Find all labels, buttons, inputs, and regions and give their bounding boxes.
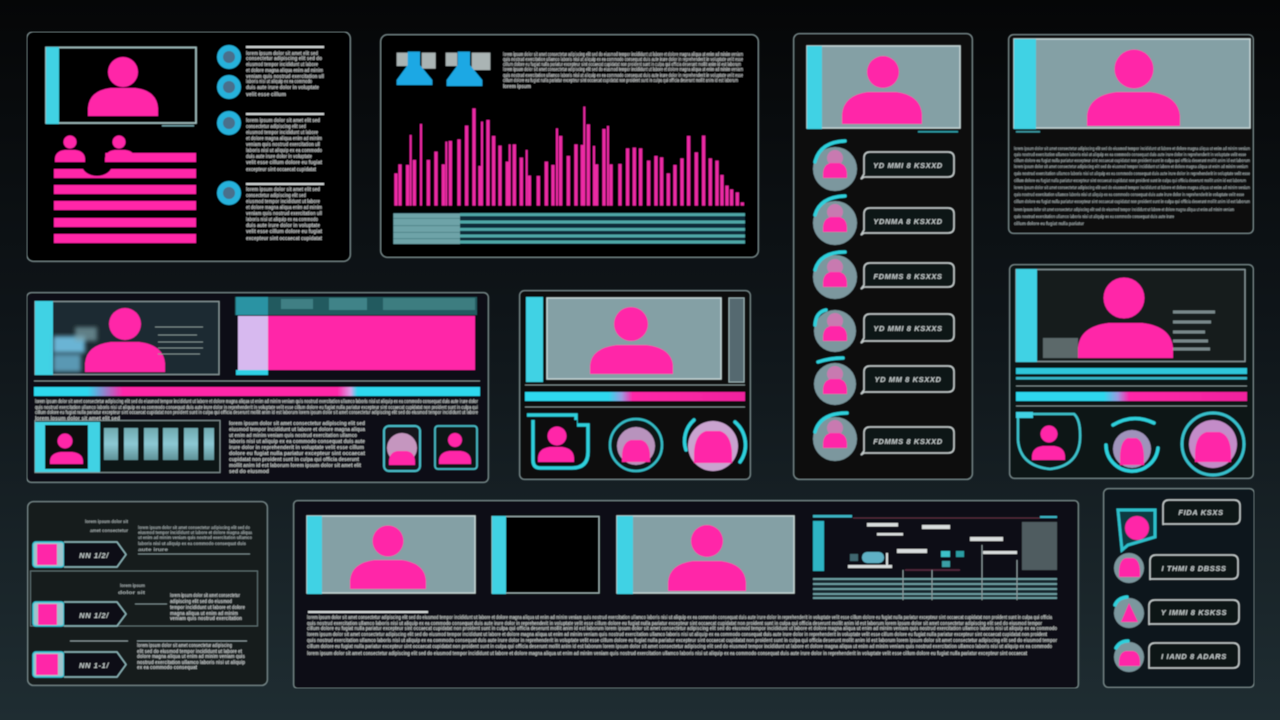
body text: lorem ipsum dolor sit amet consectetur adipiscing elit sed do eiusmod tempor incididunt ut labore et dolore magna aliqua ut enim ad minim veniam quis nostrud exercitation ullamco laboris nisi ut aliquip ex ea commodo consequat duis aute irure dolor in reprehenderit in voluptate velit esse cillum dolore eu fugiat nulla pariatur excepteur sint occaecat: [307, 651, 1027, 657]
avatar row 2: [813, 196, 954, 245]
first tag row: laboris nisi ut aliquip ex ea commodo consequat duis: [138, 541, 246, 546]
first tag row: lorem ipsum dolor sit amet consectetur adipiscing elit sed do: [138, 525, 250, 530]
panel: wide bottom: [294, 500, 1078, 688]
frame with person: [1016, 269, 1245, 362]
text block two: eiusmod tempor incididunt ut labore: [246, 130, 318, 136]
text block three: duis aute irure dolor in voluptate: [246, 223, 320, 229]
header text: lorem ipsum dolor sit amet consectetur adipiscing elit sed do eiusmod tempor incididunt ut labore et dolore magna aliqua ut enim ad minim veniam: [503, 52, 743, 58]
paragraph: dolore eu fugiat nulla pariatur excepteur sint occaecat: [229, 451, 365, 457]
text block two: velit esse cillum dolore eu fugiat: [246, 160, 322, 166]
third tag row: elit sed do eiusmod tempor incididunt ut labore et: [137, 649, 242, 655]
panel: bar chart: [380, 34, 758, 258]
text block one: duis aute irure dolor in voluptate: [246, 85, 319, 91]
panel: vertical list of avatars: [794, 34, 972, 480]
avatar row 2: YDNMA 8 KSXXD: [873, 217, 943, 226]
second tag row: NN 1/2/: [79, 611, 109, 620]
header icons: [397, 52, 490, 86]
header text: cillum dolore eu fugiat nulla pariatur excepteur sint occaecat cupidatat non proident sunt in culpa qui officia deserunt mollit anim id est laborum: [503, 62, 741, 68]
first tag row: amet consectetur: [90, 528, 128, 533]
bubble row 1: FIDA KSXS: [1178, 508, 1224, 517]
third tag row: ex ea commodo consequat: [137, 665, 197, 671]
paragraph: [229, 421, 365, 475]
text block one: lorem ipsum dolor sit amet elit sed: [246, 51, 318, 57]
panel: profile with text: [1008, 34, 1254, 234]
second tag row: lorem ipsum: [120, 583, 145, 588]
second tag row: veniam quis nostrud exercitation: [170, 616, 242, 622]
paragraph: laboris nisi ut aliquip ex ea commodo consequat duis aute: [229, 439, 365, 445]
avatar row 1: YD MMI 8 KSXXD: [873, 161, 943, 170]
text block two: [246, 113, 324, 173]
text block two: veniam quis nostrud exercitation ull: [246, 142, 321, 148]
first tag row: lorem ipsum dolor sit: [85, 519, 128, 524]
avatar row 3: FDMMS 8 KSXXS: [873, 272, 943, 281]
header text: cillum dolore eu fugiat nulla pariatur excepteur sint occaecat cupidatat non proident sunt in culpa qui officia deserunt mollit anim id est laborum: [503, 78, 738, 84]
frame three with person: [617, 516, 794, 594]
third tag row: lorem ipsum dolor sit amet consectetur adipiscing: [137, 643, 232, 649]
bubble row 2: I THMI 8 DBSSS: [1161, 564, 1227, 573]
bars: [396, 107, 742, 206]
header text: lorem ipsum dolor sit amet consectetur adipiscing elit sed do eiusmod tempor incididunt ut labore et dolore magna aliqua ut enim ad minim veniam: [503, 67, 743, 73]
second tag row: dolor sit: [118, 590, 146, 595]
body text: cillum dolore eu fugiat nulla pariatur excepteur sint occaecat cupidatat non proident sunt in culpa qui officia deserunt mollit anim id est laborum lorem ipsum dolor sit amet consectetur adipiscing elit sed do eiusmod tempor incididunt ut labore et dolore magna aliqua ut enim ad minim veniam quis nostrud exercitation ullamco laboris nisi ut aliquip ex ea commodo: [307, 626, 1057, 632]
third tag row: dolore magna aliqua ut enim ad minim veniam quis: [137, 654, 245, 660]
body text: lorem ipsum dolor sit amet consectetur adipiscing elit sed do eiusmod tempor incididunt ut labore et dolore magna aliqua ut enim ad minim veniam quis nostrud exercitation ullamco laboris nisi ut aliquip ex ea commodo consequat duis aute irure dolor in reprehenderit in voluptate velit esse cillum dolore eu fugiat nulla pariatur excepteur sint occaecat cupidatat non proident sunt in culpa qui officia: [307, 615, 1052, 621]
paragraph: cupidatat non proident sunt in culpa qui officia deserunt: [229, 457, 359, 463]
second tag row: adipiscing elit sed do eiusmod: [170, 599, 232, 605]
third tag row: [33, 641, 247, 677]
frame with person: [1014, 39, 1250, 132]
text block two: et dolore magna aliqua enim ad minim: [246, 136, 322, 142]
text block three: veniam quis nostrud exercitation ull: [246, 211, 323, 217]
wide text: quis nostrud exercitation ullamco laboris nisi ut aliquip ex ea commodo consequat duis aute irure dolor in reprehenderit in voluptate velit esse cillum dolore eu fugiat nulla pariatur excepteur sint occaecat cupidatat non proident sunt in culpa qui: [35, 405, 478, 411]
first tag row: ut enim ad minim veniam quis nostrud exercitation ullamco: [138, 535, 252, 540]
avatar row 1: [813, 141, 954, 191]
striped list with two small persons: [54, 136, 196, 243]
bubble row 3: Y IMMI 8 KSKSS: [1161, 608, 1227, 617]
cyan stripes: [1016, 368, 1247, 406]
wide text: cillum dolore eu fugiat nulla pariatur excepteur sint occaecat cupidatat non proident sunt in culpa qui officia deserunt mollit anim id est laborum lorem ipsum dolor sit amet consectetur adipiscing elit sed do eiusmod tempor incididunt ut labore: [35, 410, 478, 416]
text block one: consectetur adipiscing elit sed do: [246, 56, 322, 62]
avatar row 6: [813, 413, 954, 461]
ring icon left: [1106, 418, 1158, 471]
second tag row: lorem ipsum dolor sit amet consectetur: [170, 593, 240, 599]
text block one: laboris nisi ut aliquip ex ea commodo: [246, 79, 312, 85]
header text: lorem ipsum: [503, 84, 532, 90]
text block two: excepteur sint occaecat cupidatat: [246, 167, 316, 173]
pink card: [235, 297, 477, 375]
second tag row: magna aliqua ut enim ad minim: [170, 611, 238, 617]
avatar row 4: YD MMI 8 KSXXS: [873, 324, 943, 333]
text block three: laboris nisi ut aliquip ex ea commodo: [246, 217, 318, 223]
panel: tags list: [28, 502, 268, 686]
avatar row 5: [814, 358, 954, 405]
paragraph: irure dolor in reprehenderit in voluptate velit esse cillum: [229, 445, 365, 451]
body text: quis nostrud exercitation ullamco laboris nisi ut aliquip ex ea commodo consequat duis aute irure dolor in reprehenderit in voluptate velit esse cillum dolore eu fugiat nulla pariatur excepteur sint occaecat cupidatat non proident sunt in culpa qui officia deserunt mollit anim id est laborum lorem ipsum dolor sit amet consectetur adipiscing elit sed do eiusmod tempor: [307, 638, 1057, 644]
stripes: [813, 545, 1057, 600]
profile frame with person: [46, 47, 196, 126]
second tag row: tempor incididunt ut labore et dolore: [170, 605, 245, 611]
text block two: lorem ipsum dolor sit amet elit sed: [246, 118, 320, 124]
first tag row: NN 1/2/: [79, 551, 109, 560]
wide text: lorem ipsum dolor sit amet elit sed: [35, 416, 120, 422]
body text: quis nostrud exercitation ullamco laboris nisi ut aliquip ex ea commodo consequat duis aute irure dolor in reprehenderit in voluptate velit esse cillum dolore eu fugiat nulla pariatur excepteur sint occaecat cupidatat non proident sunt in culpa qui officia deserunt mollit anim id est laborum lorem ipsum dolor sit amet consectetur adipiscing elit sed do eiusmod tempor: [307, 621, 1042, 627]
body text: quis nostrud exercitation ullamco laboris nisi ut aliquip ex ea commodo consequat duis aute irure: [1014, 214, 1174, 219]
ring icon right: [685, 420, 745, 471]
text block one: veniam quis nostrud exercitation ull: [246, 74, 325, 80]
first tag row: eiusmod tempor incididunt ut labore et dolore magna aliqua: [138, 530, 252, 535]
progress bar: [1016, 392, 1247, 401]
round icons: [217, 45, 241, 205]
text block three: eiusmod tempor incididunt ut labore: [246, 199, 320, 205]
mini flow diagram: [813, 515, 1057, 571]
third tag row: nostrud exercitation ullamco laboris nisi ut aliquip: [137, 660, 245, 666]
frame one with person: [307, 516, 475, 594]
text block two: laboris nisi ut aliquip ex ea commodo: [246, 148, 322, 154]
text block three: et dolore magna aliqua enim ad minim: [246, 205, 322, 211]
body text: [1014, 146, 1250, 226]
avatar row 4: [814, 310, 954, 352]
header text: quis nostrud exercitation ullamco laboris nisi ut aliquip ex ea commodo consequat duis aute irure dolor in reprehenderit in voluptate velit esse: [503, 57, 743, 63]
text block one: [246, 46, 325, 98]
frame with person: [526, 297, 744, 382]
badge icons: [384, 426, 477, 471]
bubble row 4: [1114, 641, 1239, 672]
wide text: lorem ipsum dolor sit amet consectetur adipiscing elit sed do eiusmod tempor incididunt ut labore et dolore magna aliqua ut enim ad minim veniam quis nostrud exercitation ullamco laboris nisi ut aliquip ex ea commodo consequat duis aute irure dolor: [35, 399, 478, 405]
progress bar: [525, 385, 745, 407]
paragraph: eiusmod tempor incididunt ut labore et dolore magna aliqua: [229, 427, 365, 433]
body text: [307, 611, 1057, 657]
ring icon right: [1182, 413, 1244, 475]
paragraph: mollit anim id est laborum lorem ipsum dolor sit amet elit: [229, 463, 361, 469]
bubble row 1: [1118, 500, 1240, 550]
shield icon: [527, 415, 588, 468]
third tag row: NN 1-1/: [79, 661, 109, 670]
paragraph: ut enim ad minim veniam quis nostrud exercitation ullamco: [229, 433, 357, 439]
text block one: velit esse cillum: [246, 92, 287, 98]
bubble row 3: [1114, 597, 1239, 628]
text block three: velit esse cillum dolore eu fugiat: [246, 229, 322, 235]
progress bar: [34, 381, 480, 396]
body text: cillum dolore eu fugiat nulla pariatur: [1014, 221, 1084, 226]
text block one: eiusmod tempor incididunt ut labore: [246, 62, 318, 68]
body text: lorem ipsum dolor sit amet consectetur adipiscing elit sed do eiusmod tempor incididunt ut labore et dolore magna aliqua ut enim ad minim veniam quis nostrud exercitation ullamco laboris nisi ut aliquip ex ea commodo consequat duis aute irure dolor in reprehenderit in voluptate velit esse cillum dolore eu fugiat nulla pariatur excepteur sint occaecat cupidatat non proident: [307, 632, 1047, 638]
shield icon: [1016, 412, 1080, 469]
text block two: consectetur adipiscing elit sed: [246, 124, 306, 130]
text block two: duis aute irure dolor in voluptate: [246, 154, 312, 160]
text block three: [246, 183, 324, 242]
paragraph: lorem ipsum dolor sit amet consectetur adipiscing elit sed: [229, 421, 365, 427]
panel: small bubbles: [1104, 488, 1254, 688]
paragraph: sed do eiusmod: [229, 469, 269, 475]
stripe band: [393, 213, 745, 244]
wide text: [35, 399, 478, 422]
ring icon left: [610, 419, 662, 471]
avatar row 6: FDMMS 8 KSXXD: [873, 437, 943, 446]
panel: profile with rings: [520, 290, 750, 480]
second tag row: [30, 571, 258, 626]
panel: profile with text list: [26, 32, 350, 262]
first tag row: [33, 519, 252, 567]
frame two empty: [492, 516, 599, 594]
first tag row: aute irure: [138, 547, 169, 552]
body text: cillum dolore eu fugiat nulla pariatur excepteur sint occaecat cupidatat non proident sunt in culpa qui officia deserunt mollit anim id est laborum lorem ipsum dolor sit amet consectetur adipiscing elit sed do eiusmod tempor incididunt ut labore et dolore magna aliqua ut enim ad minim veniam quis nostrud exercitation ullamco laboris nisi ut aliquip ex ea commodo: [307, 644, 1052, 650]
panel: profile with rings right: [1010, 264, 1254, 478]
avatar row 5: YD MM 8 KSXXD: [875, 375, 941, 384]
text block three: consectetur adipiscing elit sed: [246, 193, 306, 199]
frame with person: [35, 301, 219, 375]
header text: [503, 52, 743, 90]
text block three: excepteur sint occaecat cupidatat: [246, 236, 322, 242]
text block one: et dolore magna aliqua enim ad minim: [246, 68, 323, 74]
frame with person: [807, 46, 960, 132]
mini frame with bars: [35, 420, 220, 472]
text block three: lorem ipsum dolor sit amet elit sed: [246, 187, 320, 193]
avatar row 3: [813, 252, 954, 299]
bubble row 4: I IAND 8 ADARS: [1161, 652, 1227, 661]
panel: wide dashboard: [26, 292, 488, 482]
bubble row 2: [1114, 553, 1238, 583]
header text: quis nostrud exercitation ullamco laboris nisi ut aliquip ex ea commodo consequat duis aute irure dolor in reprehenderit in voluptate velit esse: [503, 73, 743, 79]
